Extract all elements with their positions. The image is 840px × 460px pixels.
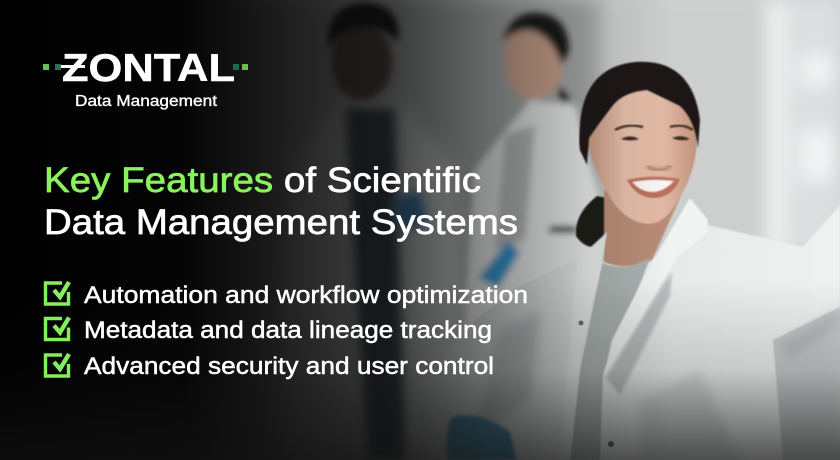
hair xyxy=(579,62,700,165)
logo dots right xyxy=(233,64,248,70)
logo subtitle: Data Management xyxy=(75,93,218,110)
nose xyxy=(647,166,671,170)
lab coat xyxy=(412,205,840,460)
eyebrows xyxy=(615,126,693,130)
heading: Data Management Systems xyxy=(44,202,518,242)
neck xyxy=(604,190,680,267)
check icon xyxy=(46,318,69,340)
heading xyxy=(44,160,518,242)
coat buttons xyxy=(578,320,614,447)
feature list xyxy=(46,282,528,380)
glove xyxy=(447,415,516,460)
ear xyxy=(579,127,589,155)
ponytail xyxy=(576,196,608,248)
item 2: Metadata and data lineage tracking xyxy=(84,317,492,344)
bottom shade xyxy=(0,280,840,460)
face xyxy=(586,84,697,224)
sweater xyxy=(570,258,650,460)
main scientist xyxy=(412,62,840,460)
check icon xyxy=(46,282,69,304)
logo xyxy=(43,47,248,110)
lapels xyxy=(560,232,607,460)
item 1: Automation and workflow optimization xyxy=(84,282,528,309)
background man xyxy=(270,3,470,460)
logo dots left xyxy=(43,64,61,70)
item 3: Advanced security and user control xyxy=(84,353,494,380)
logo wordmark: ZONTAL xyxy=(62,47,235,90)
eyes xyxy=(621,136,690,140)
smile xyxy=(627,177,680,198)
heading: Key Features of Scientific xyxy=(44,160,481,200)
check icon xyxy=(46,354,69,376)
background woman xyxy=(455,13,600,460)
coat shading xyxy=(470,310,840,460)
